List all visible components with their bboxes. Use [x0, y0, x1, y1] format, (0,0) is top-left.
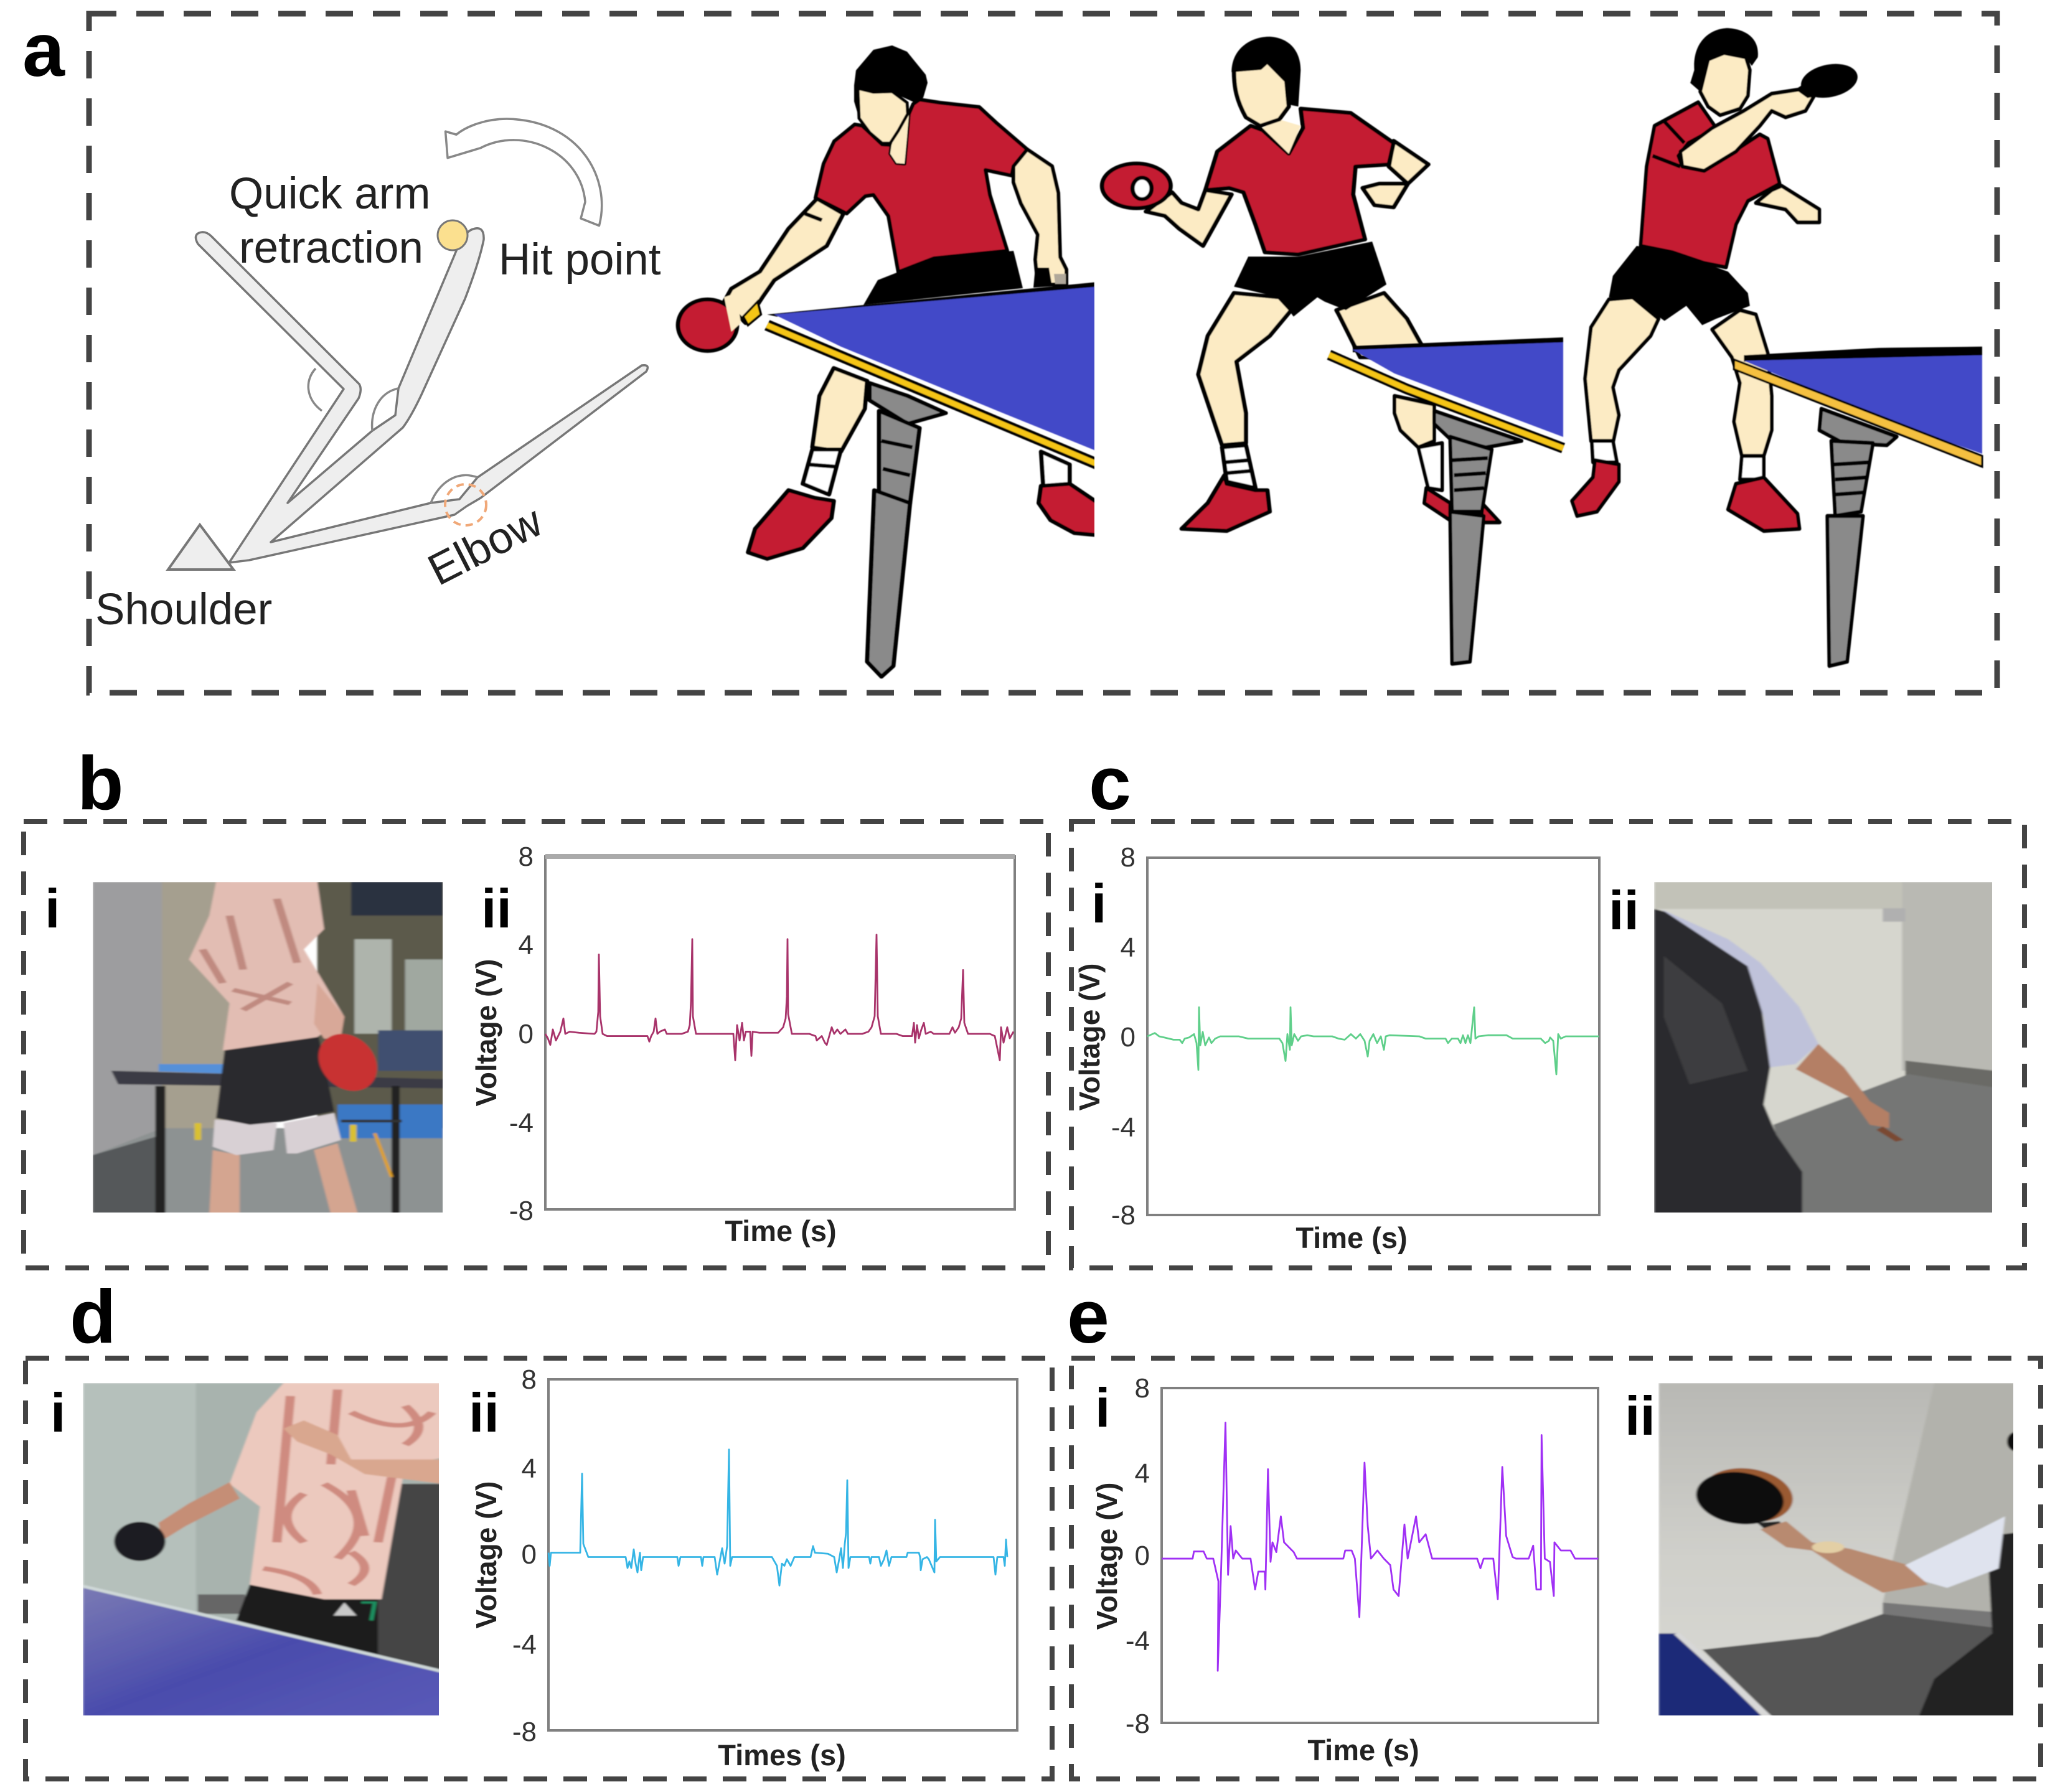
panel c: retraction and signal: [1071, 741, 2024, 1268]
chart c y axis label: Voltage (V): [1073, 964, 1106, 1110]
chart d y axis ticks: -8: [512, 1717, 537, 1747]
chart b y axis ticks: 4: [519, 930, 534, 960]
panel label b: b: [77, 741, 124, 825]
chart e y axis ticks: 8: [1135, 1373, 1150, 1404]
icon: shoulder triangle: [168, 525, 233, 570]
panel a: arm motion and players: [22, 7, 1997, 693]
chart d y axis ticks: [512, 1364, 537, 1747]
text: quick arm retraction: Quick arm: [229, 169, 431, 218]
photo b: player from behind holding red paddle: [93, 882, 446, 1214]
panel d: forward swing and signal: [26, 1274, 1052, 1779]
chart b: voltage signal: [470, 842, 1015, 1247]
icon: joint angle arcs: [308, 368, 477, 503]
chart b y axis ticks: 8: [519, 842, 534, 872]
chart c: voltage signal: [1073, 842, 1599, 1254]
label b i: i: [45, 878, 60, 939]
panel b: serve stance and signal: [24, 741, 1048, 1268]
chart e y axis ticks: -8: [1126, 1709, 1150, 1739]
chart d y axis ticks: 0: [522, 1539, 537, 1570]
chart c y axis ticks: 0: [1121, 1022, 1136, 1053]
chart e signal trace: [1162, 1423, 1598, 1671]
table 2 and leg: [1329, 337, 1563, 664]
panel label e: e: [1067, 1274, 1109, 1359]
player 1 forehand setup: [678, 45, 1098, 677]
chart d y axis ticks: -4: [512, 1630, 537, 1660]
text: hit point: Hit point: [499, 235, 661, 284]
label e i: i: [1095, 1377, 1110, 1438]
icon: elbow dashed circle: [445, 484, 486, 525]
chart c signal trace: [1147, 1007, 1599, 1074]
player 3 follow through: [1572, 28, 1982, 666]
chart e y axis ticks: [1126, 1373, 1150, 1739]
photo e: arm raised with black paddle: [1658, 1383, 2025, 1718]
panel label a: a: [22, 7, 65, 92]
chart e y axis ticks: 0: [1135, 1541, 1150, 1571]
chart d y axis ticks: 4: [522, 1453, 537, 1484]
chart d frame: [548, 1379, 1017, 1730]
photo d: player by blue table: [83, 1383, 442, 1718]
chart e y axis ticks: -4: [1126, 1626, 1150, 1656]
chart e y axis label: Voltage (V): [1091, 1483, 1123, 1630]
panel a dashed border: [89, 14, 1997, 693]
arrow: curved retraction: [446, 119, 602, 226]
player 2 backswing: [1102, 37, 1428, 531]
photo c: player's arm lowered: [1654, 882, 1995, 1214]
chart b y axis ticks: -8: [509, 1196, 534, 1226]
text: elbow: Elbow: [420, 497, 550, 595]
panel label d: d: [70, 1274, 116, 1359]
chart b y axis ticks: -4: [509, 1108, 534, 1138]
chart c frame: [1147, 858, 1599, 1215]
panel d dashed border: [26, 1358, 1052, 1779]
chart d y axis label: Voltage (V): [470, 1481, 502, 1628]
text: retraction line: retraction: [239, 223, 423, 273]
chart b x axis label: Time (s): [725, 1214, 837, 1247]
chart e y axis ticks: 4: [1135, 1458, 1150, 1489]
chart c y axis ticks: [1111, 842, 1136, 1231]
panel b dashed border: [24, 822, 1048, 1268]
chart d: voltage signal: [470, 1364, 1017, 1771]
text: shoulder: Shoulder: [95, 585, 272, 634]
chart c x axis label: Time (s): [1296, 1221, 1408, 1254]
chart d signal trace: [548, 1450, 1007, 1585]
chart e: voltage signal: [1091, 1373, 1598, 1766]
chart d y axis ticks: 8: [522, 1364, 537, 1395]
chart c y axis ticks: -8: [1111, 1200, 1136, 1231]
chart c y axis ticks: 8: [1121, 842, 1136, 873]
label c i: i: [1091, 873, 1106, 934]
chart b y axis ticks: [509, 842, 534, 1226]
chart b frame: [545, 856, 1015, 1209]
panel e dashed border: [1071, 1358, 2041, 1779]
chart c y axis ticks: -4: [1111, 1112, 1136, 1143]
label d i: i: [50, 1382, 65, 1443]
label c ii: ii: [1609, 880, 1639, 941]
chart e x axis label: Time (s): [1307, 1733, 1419, 1766]
arm positions: [195, 228, 647, 563]
label e ii: ii: [1625, 1385, 1655, 1447]
chart b signal trace: [545, 935, 1013, 1060]
panel c dashed border: [1071, 822, 2024, 1268]
arm diagram: [168, 119, 647, 570]
chart e frame: [1162, 1388, 1598, 1723]
chart b y axis ticks: 0: [519, 1019, 534, 1049]
chart c y axis ticks: 4: [1121, 932, 1136, 963]
icon: hit point ball: [438, 220, 468, 250]
chart d x axis label: Times (s): [718, 1738, 846, 1771]
label d ii: ii: [469, 1382, 499, 1443]
label b ii: ii: [481, 878, 512, 939]
panel label c: c: [1089, 741, 1131, 825]
chart b y axis label: Voltage (V): [470, 959, 502, 1106]
panel e: hit and signal: [1067, 1274, 2041, 1779]
